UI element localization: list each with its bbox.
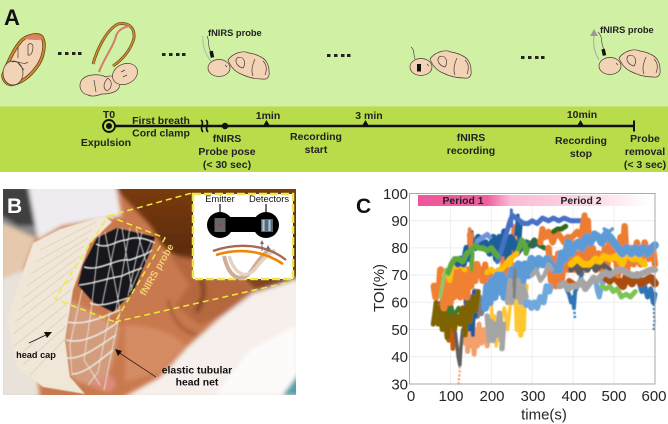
icon: newborn with probe being placed: fNIRS probe xyxy=(208,28,262,38)
period bar: Period 2 xyxy=(560,196,602,207)
x axis labels: 100 xyxy=(438,388,464,405)
timeline labels xyxy=(81,109,666,171)
panel letter B: B xyxy=(7,195,22,218)
y axis labels: TOI(%) xyxy=(371,264,388,312)
timeline labels: 3 min xyxy=(355,110,383,122)
x axis labels: time(s) xyxy=(521,406,567,424)
period bar xyxy=(418,195,650,207)
label: head cap: head cap xyxy=(16,350,56,360)
y axis labels: 80 xyxy=(391,240,408,257)
icon: newborn with probe being placed xyxy=(203,28,269,79)
timeline labels: 10min xyxy=(567,109,597,121)
zoom guide lines xyxy=(55,193,294,322)
panel B: photo of newborn with probe xyxy=(0,185,300,398)
timeline labels: T0 xyxy=(103,109,115,121)
timeline labels: start xyxy=(305,144,328,156)
timeline labels: fNIRS xyxy=(457,132,485,144)
inset: probe schematic xyxy=(193,193,293,279)
plot frame xyxy=(410,194,655,384)
probe xyxy=(78,228,155,312)
icon: newborn during recording xyxy=(410,47,471,78)
icon: newborn with cord xyxy=(80,24,141,96)
inset: probe schematic: Detectors xyxy=(249,193,289,204)
timeline labels: Recording xyxy=(555,135,607,147)
x axis labels: 500 xyxy=(601,388,627,405)
timeline labels: recording xyxy=(447,145,495,157)
timeline labels: Probe pose xyxy=(198,146,256,158)
timeline labels: (< 3 sec) xyxy=(624,159,666,171)
label: fNIRS probe: fNIRS probe xyxy=(138,242,177,298)
x axis labels: 400 xyxy=(561,388,587,405)
x axis labels: 300 xyxy=(520,388,546,405)
y axis labels: 100 xyxy=(383,186,408,203)
icon: fetus in uterus xyxy=(3,35,44,85)
timeline labels: fNIRS xyxy=(213,133,241,145)
head cap xyxy=(7,216,112,394)
timeline labels: First breath xyxy=(132,115,190,127)
y axis labels: 70 xyxy=(391,267,408,284)
dots xyxy=(162,53,186,56)
dots xyxy=(521,56,544,59)
y axis labels: 40 xyxy=(391,349,408,366)
timeline labels: Probe xyxy=(630,133,660,145)
period bar: Period 1 xyxy=(442,196,484,207)
y axis labels: 90 xyxy=(391,213,408,230)
timeline labels: Recording xyxy=(290,131,342,143)
inset: probe schematic: Emitter xyxy=(205,194,235,204)
timeline labels: 1min xyxy=(256,110,280,122)
label: elastic tubular head net: head net xyxy=(176,378,219,388)
panel C: TOI chart xyxy=(356,186,667,424)
TOI traces xyxy=(433,210,655,384)
x axis labels: 200 xyxy=(479,388,505,405)
plot grid and frame xyxy=(410,194,655,384)
timeline labels: Expulsion xyxy=(81,137,131,149)
timeline labels: (< 30 sec) xyxy=(203,159,251,171)
timeline labels: stop xyxy=(570,148,592,160)
label: elastic tubular head net: elastic tubular xyxy=(162,366,232,376)
label: head cap xyxy=(16,332,56,360)
y axis labels: 50 xyxy=(391,322,408,339)
x axis labels: 600 xyxy=(641,388,667,405)
dots xyxy=(58,52,82,55)
timeline axis xyxy=(103,120,634,132)
x axis labels: 0 xyxy=(407,388,415,405)
y axis labels: 60 xyxy=(391,294,408,312)
x axis labels xyxy=(407,388,667,424)
y axis labels xyxy=(371,186,408,394)
elastic head net xyxy=(66,228,155,390)
panel letter A: A xyxy=(4,5,20,30)
dots xyxy=(327,54,350,57)
timeline labels: Cord clamp xyxy=(132,128,190,140)
panel A: delivery timeline xyxy=(0,0,668,172)
label: elastic tubular head net xyxy=(115,349,232,388)
panel letter C: C xyxy=(356,195,371,218)
timeline labels: removal xyxy=(625,146,665,158)
icon: newborn with probe removed xyxy=(590,25,660,77)
icon: newborn with probe removed: fNIRS probe xyxy=(600,25,654,35)
y axis labels: 30 xyxy=(391,376,408,394)
